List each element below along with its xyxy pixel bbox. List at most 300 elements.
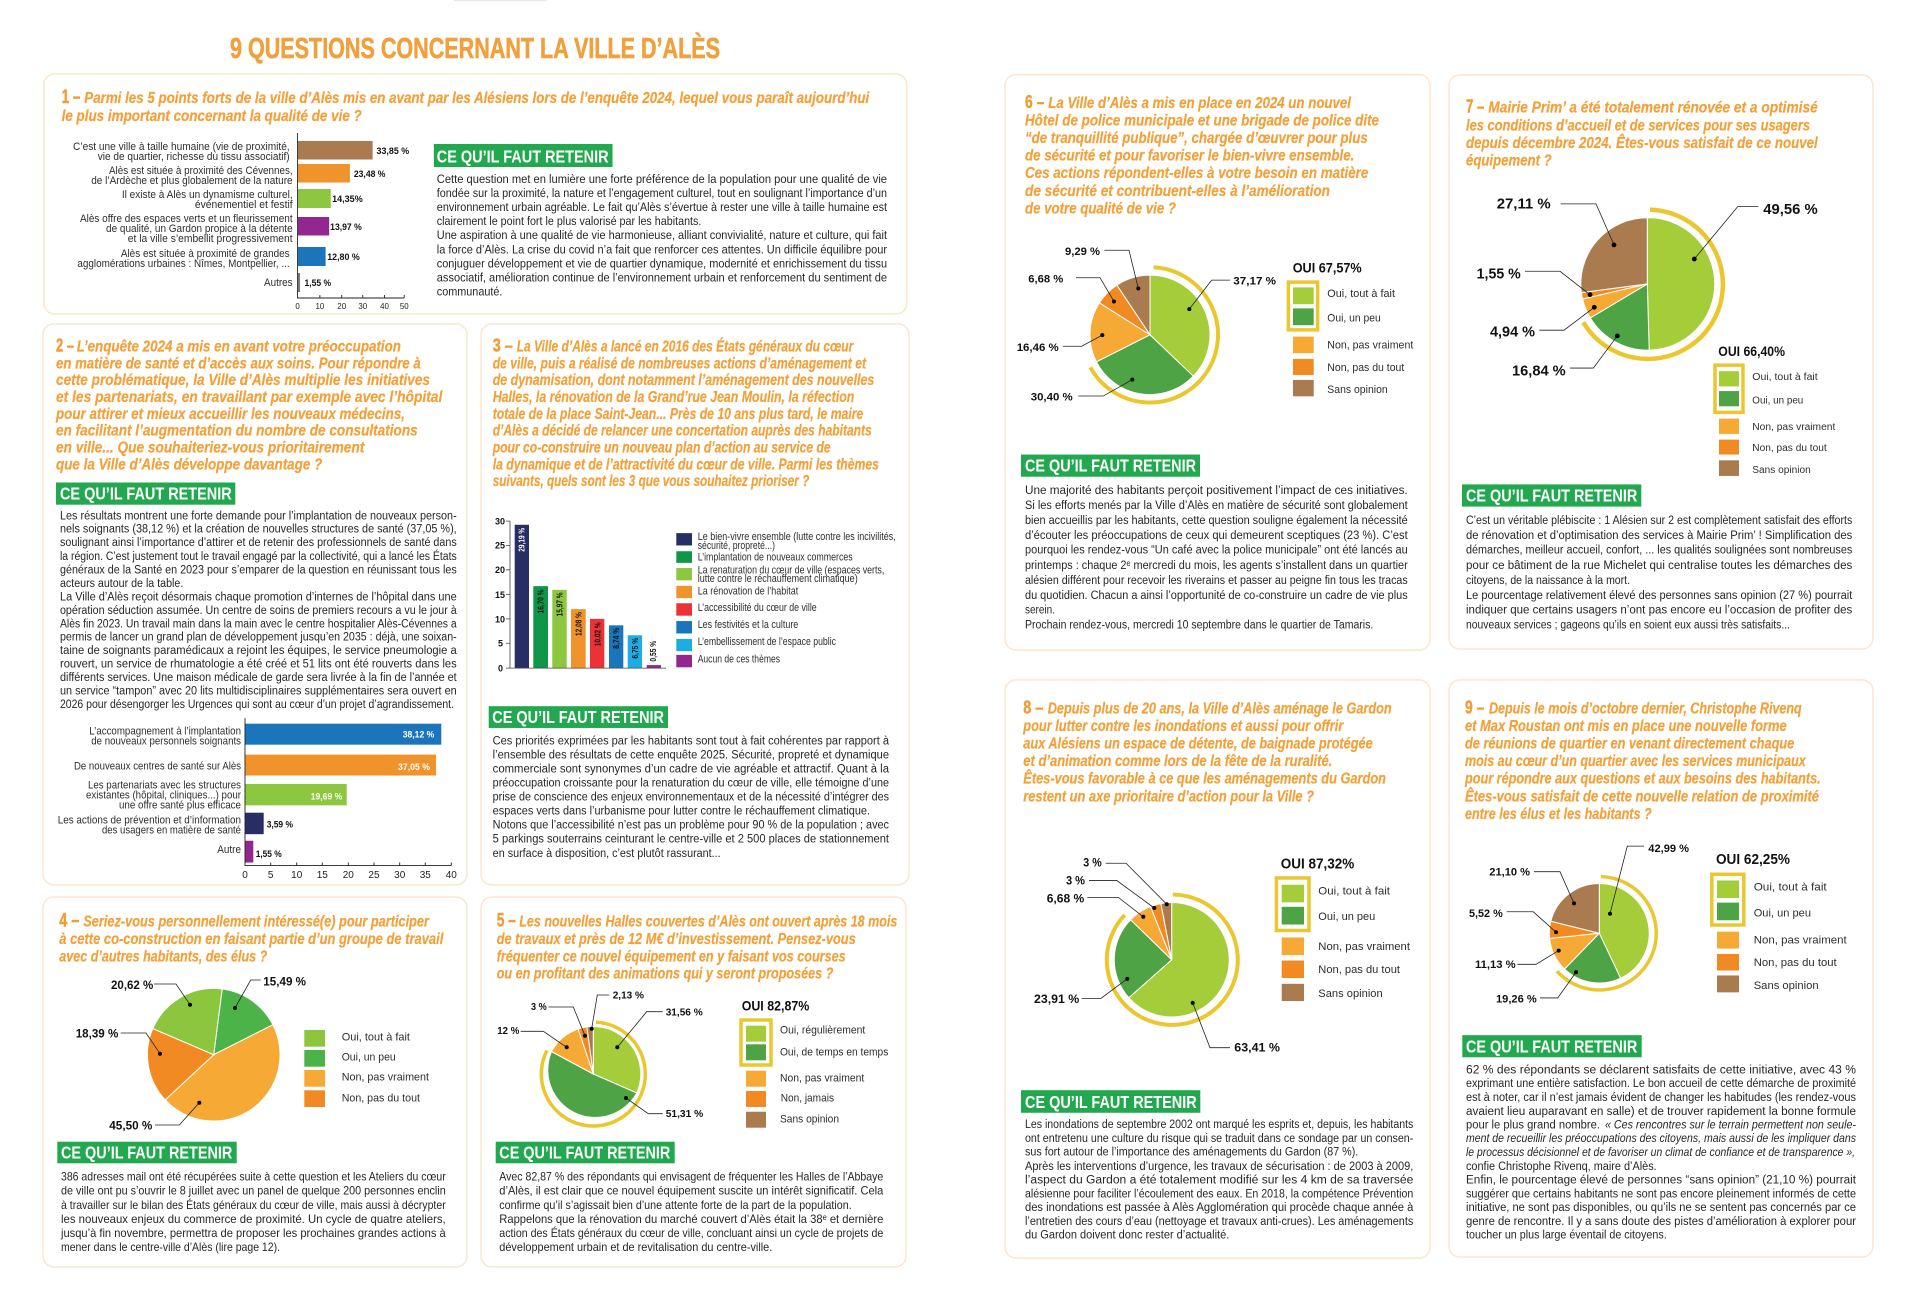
text block: commentary 9: Enfin, le pourcentage élevé de personnes “sans opinion” (21,10 %) pourrait xyxy=(1466,1173,1857,1187)
heading: ce qu'il faut retenir: CE QU’IL FAUT RETENIR xyxy=(1025,1092,1197,1112)
bar chart: points forts: 0 xyxy=(295,302,300,311)
legend: question 7 xyxy=(1715,344,1835,476)
question 5 heading: ou en profitant des animations qui y seront proposées ? xyxy=(497,966,834,983)
pie chart: question 5: 31,56 % xyxy=(666,1007,703,1019)
question 4 heading: avec d’autres habitants, des élus ? xyxy=(59,948,268,965)
question 8 heading: pour lutter contre les inondations et aussi pour offrir xyxy=(1022,718,1344,735)
question 6 heading: Hôtel de police municipale et une brigade de police dite xyxy=(1025,113,1379,130)
bar chart: santé xyxy=(58,718,457,881)
question 7 heading: équipement ? xyxy=(1466,152,1552,169)
question 6 heading: La Ville d’Alès a mis en place en 2024 un nouvel xyxy=(1048,95,1352,112)
question 3 heading: de ville, puis a réalisé de nombreuses actions d’aménagement et xyxy=(493,355,867,372)
question 3 heading xyxy=(492,336,879,490)
pie chart: question 7 xyxy=(1477,197,1818,379)
bar chart: santé: 0 xyxy=(242,870,248,881)
legend: question 8: Sans opinion xyxy=(1318,988,1383,1000)
legend: question 8: OUI 87,32% xyxy=(1281,857,1354,873)
question 9 heading: et Max Roustan ont mis en place une nouvelle forme xyxy=(1465,718,1787,735)
legend: question 5 xyxy=(741,999,889,1128)
legend: question 9: Non, pas du tout xyxy=(1754,957,1837,969)
bar chart: points forts: 12,80 % xyxy=(327,252,360,263)
pie chart: question 9: 5,52 % xyxy=(1469,908,1503,920)
question 8 heading xyxy=(1022,698,1392,805)
pie chart: question 8: 3 % xyxy=(1083,856,1102,870)
panel: question 6 xyxy=(1005,75,1430,650)
text block: commentary 8: Après les interventions d’urgence, les travaux de sécurisation : de 2003 à 2009, xyxy=(1025,1159,1413,1173)
text block: commentary 6: serein. xyxy=(1025,603,1055,617)
question 6 heading xyxy=(1025,92,1379,217)
legend: thèmes: sécurité, propreté...) xyxy=(698,540,775,552)
question 2 heading: que la Ville d’Alès développe davantage ? xyxy=(56,457,323,473)
text block: commentary 7: indiquer que certains usagers n’ont pas encore eu l’occasion de profiter des xyxy=(1466,603,1852,617)
bar chart: points forts: Alès est située à proximité des Cévennes, xyxy=(109,165,293,177)
text block: commentary 2: taine de soignants paramédicaux a rejoint les équipes, le service pneumologie a xyxy=(60,643,457,657)
question 3 heading: 3 – xyxy=(493,336,513,357)
text block: commentary 7: de rénovation et d’optimisation des services à Mairie Prim’ ! Simplification des xyxy=(1466,528,1852,542)
legend: thèmes: lutte contre le réchauffement climatique) xyxy=(698,573,858,585)
heading: ce qu'il faut retenir: CE QU’IL FAUT RETENIR xyxy=(492,707,664,727)
question 5 heading: fréquenter ce nouvel équipement en y faisant vos courses xyxy=(497,948,846,965)
question 1 heading: 1 – xyxy=(62,87,80,108)
question 2 heading: pour attirer et mieux accueillir les nouveaux médecins, xyxy=(55,406,405,423)
bar chart: santé: 10 xyxy=(291,870,303,881)
question 4 heading: 4 – xyxy=(59,910,79,931)
pie chart: question 5: 12 % xyxy=(497,1025,520,1037)
question 9 heading: pour répondre aux questions et aux besoins des habitants. xyxy=(1464,771,1821,788)
bar chart: points forts: 14,35% xyxy=(332,194,363,205)
legend: thèmes: Aucun de ces thèmes xyxy=(698,654,780,666)
text block: commentary 5: Avec 82,87 % des répondants qui envisagent de fréquenter les Halles de l’Abbaye xyxy=(499,1170,884,1184)
text block: commentary 3 xyxy=(493,733,890,860)
pie chart: question 8 xyxy=(1034,856,1280,1055)
text block: commentary 4: les nouveaux enjeux du commerce de proximité. Un cycle de quatre ateliers, xyxy=(61,1212,446,1226)
text block: commentary 7: nouveaux services ; gageons qu’ils en soient eux aussi très satisfaits... xyxy=(1466,618,1790,632)
text block: commentary 3: en surface à disposition, c’est plutôt rassurant... xyxy=(493,846,721,860)
panel: question 8 xyxy=(1005,680,1430,1258)
question 8 heading: aux Alésiens un espace de détente, de baignade protégée xyxy=(1023,735,1373,752)
text block: commentary 9: genre de rencontre. Il y a sans doute des pistes d’amélioration à explorer pour xyxy=(1466,1214,1856,1228)
bar chart: santé: 5 xyxy=(268,870,274,881)
question 1 heading: le plus important concernant la qualité de vie ? xyxy=(62,108,362,125)
panel: question 4 xyxy=(43,897,467,1267)
text block: commentary 4: à travailler sur le bilan des États généraux du cœur de ville, mais aussi à décrypter xyxy=(61,1197,446,1212)
pie chart: question 6: 6,68 % xyxy=(1028,273,1064,285)
bar chart: thèmes: 25 xyxy=(495,541,505,551)
legend: question 9: Oui, tout à fait xyxy=(1754,881,1827,893)
legend: question 6 xyxy=(1288,260,1413,396)
text block: commentary 8: Les inondations de septembre 2002 ont marqué les esprits et, depuis, les habitants xyxy=(1025,1117,1413,1131)
pie chart: question 6: 9,29 % xyxy=(1065,246,1100,258)
text block: commentary 2: Les résultats montrent une forte demande pour l’implantation de nouveaux person- xyxy=(60,508,457,522)
question 8 heading: et d’animation comme lors de la fête de la ruralité. xyxy=(1023,753,1332,770)
bar chart: santé: 15 xyxy=(317,870,328,881)
text block: commentary 7 xyxy=(1466,513,1853,632)
pie chart: question 4: 18,39 % xyxy=(76,1027,119,1041)
legend: question 8: Oui, tout à fait xyxy=(1318,886,1390,898)
bar chart: points forts: 33,85 % xyxy=(377,146,410,157)
bar chart: santé: de nouveaux personnels soignants xyxy=(91,736,241,748)
pie chart: question 6 xyxy=(1017,246,1276,404)
question 2 heading: en matière de santé et d’accès aux soins. Pour répondre à xyxy=(56,355,421,372)
text block: commentary 9: avaient lieu auparavant en salle) et de trouver rapidement la bonne formule xyxy=(1466,1104,1856,1118)
legend: thèmes: La renaturation du cœur de ville (espaces verts, xyxy=(698,564,884,576)
bar chart: thèmes: 5 xyxy=(498,639,503,649)
pie chart: question 9: 19,26 % xyxy=(1496,994,1537,1006)
bar chart: points forts: 1,55 % xyxy=(304,278,332,289)
legend: question 5: Oui, régulièrement xyxy=(780,1025,865,1037)
pie chart: question 6: 30,40 % xyxy=(1031,392,1073,404)
text block: commentary 9: « Ces rencontres sur le terrain permettent non seule- xyxy=(1605,1118,1856,1131)
panel: question 1 xyxy=(44,74,907,314)
question 2 heading: en ville... Que souhaiteriez-vous prioritairement xyxy=(56,439,365,456)
pie chart: question 8: 23,91 % xyxy=(1034,992,1080,1006)
text block: commentary 2: opération séduction assumée. Un centre de soins de premiers recours a vu le jour à xyxy=(60,603,457,617)
bar chart: points forts: agglomérations urbaines : Nîmes, Montpellier, ... xyxy=(77,258,290,270)
legend: question 4 xyxy=(304,1030,429,1107)
legend: thèmes: L’embellissement de l’espace public xyxy=(698,636,836,648)
bar chart: points forts: 20 xyxy=(337,302,347,311)
bar chart: thèmes: 6,75 % xyxy=(630,637,640,659)
bar chart: thèmes: 15 xyxy=(495,590,505,600)
pie chart: question 4 xyxy=(76,974,306,1132)
bar chart: santé: De nouveaux centres de santé sur Alès xyxy=(74,761,241,773)
question 6 heading: de sécurité et pour favoriser le bien-vivre ensemble. xyxy=(1025,148,1354,165)
text block: commentary 1: clairement le point fort le plus valorisé par les habitants. xyxy=(437,214,701,228)
legend: question 6: Non, pas vraiment xyxy=(1327,340,1413,352)
legend: question 8: Non, pas vraiment xyxy=(1318,941,1410,953)
bar chart: points forts: de qualité, un Gardon propice à la détente xyxy=(106,223,293,235)
text block: commentary 8: du Gardon doivent donc rester d’actualité. xyxy=(1025,1228,1229,1242)
text block: commentary 6 xyxy=(1025,483,1408,632)
legend: question 9: Non, pas vraiment xyxy=(1754,935,1847,947)
question 7 heading: 7 – xyxy=(1466,97,1484,118)
text block: commentary 2: soulignant ainsi l’importance d’attirer et de retenir des professionnels de santé dans xyxy=(60,535,457,549)
bar chart: santé: 19,69 % xyxy=(311,791,343,802)
text block: commentary 4: de ville ont pu s’ouvrir le 8 juillet avec un panel de quelque 200 personnes enclin xyxy=(61,1184,446,1198)
legend: question 8: Non, pas du tout xyxy=(1318,964,1400,976)
bar chart: points forts: événementiel et festif xyxy=(195,199,294,211)
legend: question 5: Sans opinion xyxy=(780,1113,839,1125)
legend: question 9: Sans opinion xyxy=(1754,980,1819,992)
bar chart: points forts: vie de quartier, richesse du tissu associatif) xyxy=(98,151,290,163)
legend: thèmes: L’implantation de nouveaux commerces xyxy=(698,552,853,564)
bar chart: santé: 30 xyxy=(394,870,406,881)
question 9 heading xyxy=(1464,698,1821,823)
legend: thèmes xyxy=(676,531,896,667)
bar chart: points forts: 23,48 % xyxy=(354,169,386,180)
pie chart: question 7: 16,84 % xyxy=(1512,363,1566,379)
legend: question 7: Oui, un peu xyxy=(1752,395,1803,406)
panel: question 9 xyxy=(1449,680,1873,1257)
pie chart: question 9: 21,10 % xyxy=(1489,866,1530,878)
text block: commentary 8: alésienne pour faciliter l’écoulement des eaux. En 2018, la compétence Prévention xyxy=(1025,1186,1413,1200)
bar chart: thèmes: 0 xyxy=(498,664,503,674)
question 6 heading: 6 – xyxy=(1025,92,1044,113)
bar chart: points forts xyxy=(73,133,410,311)
pie chart: question 7: 4,94 % xyxy=(1490,324,1535,340)
question 9 heading: Êtes-vous satisfait de cette nouvelle relation de proximité xyxy=(1465,787,1819,805)
title: 9 QUESTIONS CONCERNANT LA VILLE D’ALÈS xyxy=(230,31,720,65)
question 8 heading: Depuis plus de 20 ans, la Ville d’Alès aménage le Gardon xyxy=(1048,701,1392,718)
text block: commentary 7: C’est un véritable plébiscite : 1 Alésien sur 2 est complètement satisfait des efforts xyxy=(1466,513,1852,527)
question 7 heading: Mairie Prim’ a été totalement rénovée et a optimisé xyxy=(1488,100,1818,117)
question 5 heading: Les nouvelles Halles couvertes d’Alès ont ouvert après 18 mois xyxy=(519,913,898,930)
bar chart: points forts: 13,97 % xyxy=(330,222,362,233)
text block: commentary 1: conjuguer développement et vie de quartier dynamique, modernité et enrichissement du tissu xyxy=(437,257,887,271)
text block: commentary 3: 5 parkings souterrains ceinturant le centre-ville et 2 500 places de stationnement xyxy=(493,832,890,846)
bar chart: santé: Les actions de prévention et d’information xyxy=(58,815,241,827)
bar chart: thèmes: 0,55 % xyxy=(648,640,658,662)
pie chart: question 4: 15,49 % xyxy=(263,974,306,988)
legend: question 5: Non, jamais xyxy=(781,1093,834,1105)
question 4 heading xyxy=(59,910,444,965)
question 4 heading: à cette co-construction en faisant partie d’un groupe de travail xyxy=(59,931,444,948)
bar chart: santé: 35 xyxy=(420,870,431,881)
legend: question 4: Oui, tout à fait xyxy=(342,1032,410,1044)
question 8 heading: Êtes-vous favorable à ce que les aménagements du Gardon xyxy=(1023,770,1386,788)
bar chart: points forts: 30 xyxy=(358,302,368,311)
text block: commentary 8: l’aspect du Gardon a été totalement modifié sur les 4 km de sa traversée xyxy=(1025,1173,1414,1187)
bar chart: thèmes: 30 xyxy=(495,516,505,526)
text block: commentary 6: bien accueillis par les habitants, cette question souligne également la nécessité xyxy=(1025,513,1408,527)
bar chart: santé: L’accompagnement à l’implantation xyxy=(89,726,241,738)
legend: question 7: OUI 66,40% xyxy=(1718,344,1785,359)
text block: commentary 4: 386 adresses mail ont été récupérées suite à cette question et les Ateliers du cœur xyxy=(61,1170,446,1184)
legend: question 9 xyxy=(1712,852,1847,992)
text block: commentary 3: prise de conscience des enjeux environnementaux et de la nécessité d’intégrer des xyxy=(493,789,889,803)
text block: commentary 4: mener dans le centre-ville d’Alès (lire page 12). xyxy=(61,1240,280,1254)
question 8 heading: restent un axe prioritaire d’action pour la Ville ? xyxy=(1023,788,1314,805)
text block: commentary 2 xyxy=(60,508,457,711)
legend: thèmes: L’accessibilité du cœur de ville xyxy=(698,602,817,614)
bar chart: points forts: Autres xyxy=(264,277,293,289)
pie chart: question 5: 2,13 % xyxy=(613,990,645,1002)
question 7 heading: les conditions d’accueil et de services pour ses usagers xyxy=(1466,118,1810,134)
question 5 heading: de travaux et près de 12 M€ d’investissement. Pensez-vous xyxy=(497,931,856,948)
question 9 heading: Depuis le mois d’octobre dernier, Christophe Rivenq xyxy=(1489,701,1802,718)
text block: commentary 8: des inondations est passée à Alès Agglomération qui procède chaque année à xyxy=(1025,1200,1414,1214)
bar chart: thèmes: 8,74 % xyxy=(611,627,621,649)
legend: question 4: Non, pas du tout xyxy=(342,1092,420,1104)
text block: commentary 9: est à noter, car il n’est jamais évident de changer les habitudes (les rendez-vous xyxy=(1466,1090,1856,1104)
legend: question 5: Oui, de temps en temps xyxy=(780,1047,889,1059)
text block: commentary 2: la région. C’est justement tout le travail engagé par la collectivité, qui a lancé les États xyxy=(60,548,457,563)
text block: commentary 5: confirme qu’il s’agissait bien d’une attente forte de la part de la population. xyxy=(499,1198,852,1212)
bar chart: santé: 40 xyxy=(446,870,457,881)
pie chart: question 8: 3 % xyxy=(1066,874,1085,888)
bar chart: points forts: Il existe à Alès un dynamisme culturel, xyxy=(122,189,293,201)
text block: commentary 9: toucher un plus large éventail de citoyens. xyxy=(1466,1228,1667,1242)
bar chart: thèmes: 15,97 % xyxy=(554,592,564,616)
text block: commentary 2: nels soignants (38,12 %) et la création de nouvelles structures de santé (37,05 %), xyxy=(60,522,457,536)
legend: question 7: Non, pas vraiment xyxy=(1752,422,1835,433)
text block: commentary 3: préoccupation croissante pour la renaturation du cœur de ville, elle témoigne d’une xyxy=(493,775,889,789)
bar chart: santé: 3,59 % xyxy=(267,820,294,831)
heading: ce qu'il faut retenir: CE QU’IL FAUT RETENIR xyxy=(499,1143,671,1163)
question 7 heading xyxy=(1466,97,1818,169)
text block: commentary 6: du quotidien. Chacun a ainsi l’opportunité de co-construire un cadre de vie plus xyxy=(1025,588,1408,602)
text block: commentary 6: Une majorité des habitants perçoit positivement l’impact de ces initiatives. xyxy=(1025,483,1408,497)
text block: commentary 2: permis de lancer un grand plan de développement jusqu’en 2035 : déjà, une soixan- xyxy=(60,630,457,644)
text block: commentary 8: l’entretien des cours d’eau (nettoyage et travaux anti-crues). Les aménagements xyxy=(1025,1214,1413,1228)
text block: commentary 9: ment de recueillir les préoccupations des citoyens, mais aussi de les impliquer dans xyxy=(1466,1131,1856,1145)
bar chart: santé: 25 xyxy=(368,870,380,881)
text block: commentary 9: exprimant une entière satisfaction. Le bon accueil de cette démarche de proximité xyxy=(1466,1076,1856,1090)
text block: commentary 9: le processus décisionnel et de favoriser un climat de confiance et de transparence », xyxy=(1466,1145,1855,1159)
pie chart: question 8: 6,68 % xyxy=(1047,892,1085,906)
question 3 heading: totale de la place Saint-Jean... Près de 10 ans plus tard, le maire xyxy=(493,406,864,423)
text block: commentary 5: d’Alès, il est clair que ce nouvel équipement suscite un intérêt significatif. Cela xyxy=(499,1184,884,1198)
question 9 heading: mois au cœur d’un quartier avec les services municipaux xyxy=(1465,753,1807,770)
pie chart: question 7: 27,11 % xyxy=(1497,197,1551,212)
legend: question 7: Oui, tout à fait xyxy=(1752,372,1818,383)
text block: commentary 6: pourquoi les rendez-vous “Un café avec la police municipale” ont été lancés au xyxy=(1025,543,1408,557)
legend: question 4: Oui, un peu xyxy=(342,1052,396,1064)
text block: commentary 2: généraux de la Santé en 2023 pour s’emparer de la question en réunissant tous les xyxy=(60,562,457,576)
question 6 heading: de votre qualité de vie ? xyxy=(1025,200,1176,217)
question 3 heading: la dynamique et de l’attractivité du cœur de ville. Parmi les thèmes xyxy=(493,457,879,473)
question 6 heading: Ces actions répondent-elles à votre besoin en matière xyxy=(1025,165,1369,182)
text block: commentary 4: jusqu’à fin novembre, permettra de proposer les prochaines grandes actions à xyxy=(60,1226,446,1240)
text block: commentary 3: commerciale sont synonymes d’un cadre de vie agréable et attractif. Quant à la xyxy=(493,761,889,775)
pie chart: question 4: 45,50 % xyxy=(109,1118,153,1132)
heading: ce qu'il faut retenir: CE QU’IL FAUT RETENIR xyxy=(61,1143,233,1163)
pie chart: question 7: 49,56 % xyxy=(1763,202,1818,218)
bar chart: santé: Les partenariats avec les structures xyxy=(88,779,241,791)
bar chart: points forts: 40 xyxy=(380,302,389,311)
heading: ce qu'il faut retenir: CE QU’IL FAUT RETENIR xyxy=(1025,456,1196,476)
legend: thèmes: Le bien-vivre ensemble (lutte contre les incivilités, xyxy=(698,531,896,543)
text block: commentary 5: Rappelons que la rénovation du marché couvert d’Alès était la 38ᵉ et dernière xyxy=(499,1212,884,1226)
text block: commentary 4 xyxy=(60,1170,446,1254)
text block: commentary 2: acteurs autour de la table. xyxy=(60,576,183,590)
text block: commentary 1: la force d’Alès. La crise du covid n’a fait que renforcer ces attentes. Un difficile équilibre pour xyxy=(437,243,887,257)
pie chart: question 8: 63,41 % xyxy=(1234,1041,1280,1055)
legend: question 8: Oui, un peu xyxy=(1318,911,1375,923)
text block: commentary 3: espaces verts dans l’urbanisme pour lutter contre le réchauffement climatique. xyxy=(493,804,870,818)
text block: commentary 3: Ces priorités exprimées par les habitants sont tout à fait cohérentes par rapport à xyxy=(493,733,889,747)
text block: commentary 9: suggérer que certains habitants ne sont pas encore pleinement informés de cette xyxy=(1466,1186,1856,1200)
question 6 heading: “de tranquillité publique”, chargée d’œuvrer pour plus xyxy=(1025,130,1368,147)
text block: commentary 1: Une aspiration à une qualité de vie harmonieuse, alliant convivialité, nature et culture, qui fait xyxy=(437,228,888,242)
panel: question 3 xyxy=(481,324,909,885)
legend: thèmes: Les festivités et la culture xyxy=(698,619,798,631)
question 3 heading: Halles, la rénovation de la Grand’rue Jean Moulin, la réfection xyxy=(493,389,854,406)
legend: question 5: Non, pas vraiment xyxy=(780,1072,864,1084)
pie chart: question 6: 16,46 % xyxy=(1017,342,1059,354)
question 2 heading: L’enquête 2024 a mis en avant votre préoccupation xyxy=(77,339,401,356)
legend: question 7: Non, pas du tout xyxy=(1752,443,1827,454)
legend: question 9: Oui, un peu xyxy=(1754,907,1811,919)
text block: commentary 1 xyxy=(437,172,888,299)
pie chart: question 5: 3 % xyxy=(531,1001,547,1013)
text block: commentary 6: Si les efforts menés par la Ville d’Alès en matière de sécurité sont globalement xyxy=(1025,498,1408,512)
question 3 heading: La Ville d’Alès a lancé en 2016 des États généraux du cœur xyxy=(517,339,854,356)
pie chart: question 5: 51,31 % xyxy=(666,1108,704,1120)
text block: commentary 8 xyxy=(1025,1117,1414,1242)
question 7 heading: depuis décembre 2024. Êtes-vous satisfait de ce nouvel xyxy=(1466,134,1818,152)
heading: ce qu'il faut retenir: CE QU’IL FAUT RETENIR xyxy=(60,484,232,504)
text block: commentary 1: fondée sur la proximité, la nature et l’engagement culturel, tout en soulignant l’importance d’un xyxy=(437,186,887,200)
question 2 heading: en facilitant l’augmentation du nombre de consultations xyxy=(56,423,418,440)
bar chart: santé: 20 xyxy=(343,870,354,881)
text block: commentary 2: La Ville d’Alès reçoit désormais chaque promotion d’internes de l’hôpital dans une xyxy=(60,589,457,603)
text block: commentary 9: pour le plus grand nombre. xyxy=(1466,1118,1600,1131)
text block: commentary 2: 2026 pour désengorger les Urgences qui sont au cœur d’un projet d’agrandissement. xyxy=(60,697,454,711)
question 3 heading: de dynamisation, dont notamment l’aménagement des nouvelles xyxy=(493,372,875,389)
bar chart: santé: existantes (hôpital, cliniques...) pour xyxy=(86,789,241,801)
legend: question 6: Oui, tout à fait xyxy=(1327,288,1395,300)
bar chart: thèmes: 12,08 % xyxy=(573,612,583,636)
legend: question 6: Oui, un peu xyxy=(1327,312,1381,324)
text block: commentary 3: Notons que l’accessibilité n’est pas un problème pour 90 % de la population ; avec xyxy=(493,818,889,832)
text block: commentary 8: ont entretenu une culture du risque qui se traduit dans ce sondage par un consen- xyxy=(1025,1131,1413,1145)
question 1 heading: Parmi les 5 points forts de la ville d’Alès mis en avant par les Alésiens lors de l’enquête 2024, lequel vous paraît aujourd’hui xyxy=(84,90,870,107)
text block: commentary 9: confie Christophe Rivenq, maire d’Alès. xyxy=(1466,1159,1657,1173)
question 2 heading: cette problématique, la Ville d’Alès multiplie les initiatives xyxy=(56,372,430,389)
pie chart: question 9: 11,13 % xyxy=(1475,959,1516,971)
text block: commentary 9: initiative, ne sont pas disponibles, ou qu’ils ne se sentent pas concernés par ce xyxy=(1466,1200,1856,1214)
text block: commentary 5: action des États généraux du cœur de ville, concluant ainsi un cycle de projets de xyxy=(499,1225,884,1240)
question 5 heading xyxy=(497,910,898,983)
question 3 heading: d’Alès a décidé de relancer une concertation auprès des habitants xyxy=(493,423,872,440)
pie chart: question 5 xyxy=(497,990,704,1126)
bar chart: points forts: Alès offre des espaces verts et un fleurissement xyxy=(80,213,293,225)
question 9 heading: de réunions de quartier en venant directement chaque xyxy=(1465,735,1795,752)
legend: question 5: OUI 82,87% xyxy=(742,999,809,1014)
heading: ce qu'il faut retenir: CE QU’IL FAUT RETENIR xyxy=(437,146,609,167)
question 1 heading xyxy=(62,87,870,125)
legend: question 6: Non, pas du tout xyxy=(1327,362,1404,374)
question 9 heading: entre les élus et les habitants ? xyxy=(1465,806,1652,823)
text block: commentary 6: Prochain rendez-vous, mercredi 10 septembre dans le quartier de Tamaris. xyxy=(1025,618,1373,632)
question 3 heading: suivants, quels sont les 3 que vous souhaitez prioriser ? xyxy=(493,473,810,490)
bar chart: santé: une offre santé plus efficace xyxy=(119,799,241,811)
text block: commentary 7: démarches, meilleur accueil, confort, ... les qualités soulignées sont nombreuses xyxy=(1466,543,1852,557)
bar chart: points forts: C’est une ville à taille humaine (vie de proximité, xyxy=(73,141,290,153)
question 8 heading: 8 – xyxy=(1023,698,1043,719)
legend: question 4: Non, pas vraiment xyxy=(342,1072,429,1084)
text block: commentary 7: Le pourcentage relativement élevé des personnes sans opinion (27 %) pourrait xyxy=(1466,588,1853,602)
bar chart: points forts: 50 xyxy=(400,302,409,311)
pie chart: question 9: 42,99 % xyxy=(1648,843,1689,855)
panel: question 5 xyxy=(481,897,906,1267)
question 5 heading: 5 – xyxy=(497,910,516,931)
question 2 heading: 2 – xyxy=(56,336,74,357)
legend: question 8 xyxy=(1276,857,1410,1001)
text block: commentary 5 xyxy=(499,1170,884,1254)
bar chart: points forts: de l’Ardèche et plus globalement de la nature xyxy=(91,175,293,187)
text block: commentary 2: un service “tampon” avec 20 lits multidisciplinaires supplémentaires sera ouvert en xyxy=(60,684,457,698)
text block: commentary 2: différents services. Une maison médicale de garde sera livrée à la fin de l’année et xyxy=(60,670,457,684)
legend: question 9: OUI 62,25% xyxy=(1716,852,1790,868)
panel: question 2 xyxy=(43,324,467,885)
question 4 heading: Seriez-vous personnellement intéressé(e) pour participer xyxy=(83,913,430,930)
question 9 heading: 9 – xyxy=(1465,698,1484,719)
bar chart: points forts: Alès est située à proximité de grandes xyxy=(121,248,290,260)
text block: commentary 7: citoyens, de la naissance à la mort. xyxy=(1466,573,1630,587)
text block: commentary 7: pour ce bâtiment de la rue Michelet qui centralise toutes les démarches des xyxy=(1466,558,1852,572)
text block: commentary 6: d’écouter les préoccupations de ceux qui demeurent sceptiques (23 %). C’est xyxy=(1025,528,1408,542)
text block: commentary 2: rouvert, un service de rhumatologie a été créé et 51 lits ont été rouverts dans les xyxy=(60,657,457,671)
text block: commentary 9 xyxy=(1466,1062,1857,1242)
text block: commentary 8: sus fort autour de l’importance des aménagements du Gardon (87 %). xyxy=(1025,1145,1358,1159)
text block: commentary 9: 62 % des répondants se déclarent satisfaits de cette initiative, avec 43 % xyxy=(1466,1062,1856,1076)
text block: commentary 6: printemps : chaque 2ᵉ mercredi du mois, les agents s’installent dans un quartier xyxy=(1025,558,1408,572)
bar chart: points forts: et la ville s’embellit progressivement xyxy=(128,233,293,245)
question 2 heading xyxy=(55,336,443,473)
pie chart: question 9 xyxy=(1469,843,1689,1006)
